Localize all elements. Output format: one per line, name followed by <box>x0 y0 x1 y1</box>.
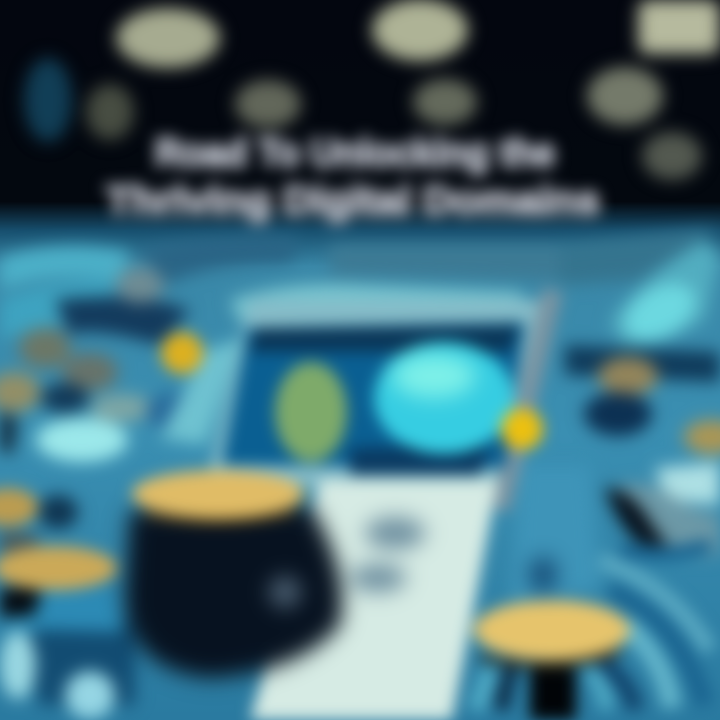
title: Thriving Digital Domains <box>106 179 600 223</box>
icon: yellow coin left <box>161 332 203 374</box>
screen <box>222 322 525 468</box>
icon: cyan sphere <box>374 342 514 454</box>
panel: document <box>250 480 498 720</box>
document text lines <box>350 517 425 592</box>
screen bottom band <box>350 445 490 475</box>
screen frame <box>210 300 545 490</box>
gold coin lid <box>132 470 304 518</box>
bottom right streaks <box>475 545 710 710</box>
title: Road To Unlocking the <box>155 131 555 175</box>
icon: coin pot <box>125 470 342 678</box>
floating top icons <box>24 0 720 180</box>
icon: green coin <box>275 362 347 462</box>
panel: laptop screen <box>210 290 553 510</box>
title <box>106 131 600 223</box>
screen frame edge <box>500 290 553 510</box>
icon: gold coin stack right <box>474 557 630 720</box>
scattered background shapes <box>0 228 720 719</box>
screen top band <box>250 325 520 352</box>
icon: yellow coin right <box>501 408 543 450</box>
icon: gold coins left <box>0 488 117 590</box>
upper right shapes <box>610 240 720 344</box>
